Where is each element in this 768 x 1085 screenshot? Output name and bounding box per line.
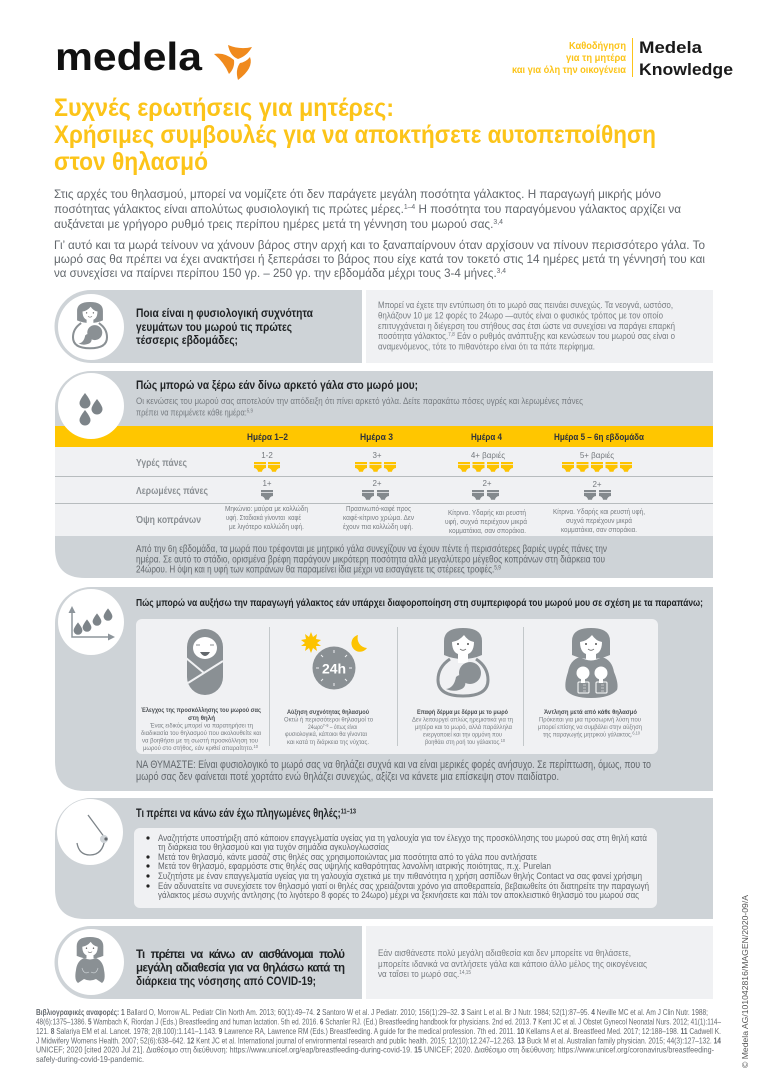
intro text: Γι’ αυτό και τα μωρά τείνουν να χάνουν βάρος στην αρχή και το ξαναπαίρνουν όταν αρχίσουν να πίνουν περισσότερο γάλα. Το bbox=[54, 238, 705, 252]
tip text: pumping: 6,10 bbox=[632, 730, 640, 736]
tip text: latch check: διαδικασία του θηλασμού που ακολουθείτε και bbox=[141, 729, 261, 737]
icons: soiled diapers bbox=[261, 490, 611, 500]
heading: feeding frequency: τέσσερις εβδομάδες; bbox=[136, 335, 238, 347]
table header: Ημέρα 5 – 6η εβδομάδα bbox=[554, 432, 644, 443]
stool descriptions: έχουν πια κολλώδη υφή. bbox=[343, 523, 413, 531]
icon: unwell mother bbox=[58, 929, 124, 995]
intro: enough milk: 5,9 bbox=[247, 408, 253, 414]
intro text: Η ποσότητα του παραγόμενου γάλακτος αρχίζει να bbox=[415, 202, 681, 216]
icon: breast outline bbox=[57, 799, 123, 865]
tip text: more feeds: Οκτώ ή περισσότεροι θηλασμοί το bbox=[284, 716, 373, 724]
soiled diaper counts: 2+ bbox=[482, 479, 492, 488]
tip text: skin contact bbox=[412, 709, 513, 746]
reminder text: μωρό σας δεν φαίνεται ποτέ χορτάτο ενώ θηλάζει συνεχώς, αξίζει να κάνετε μια επίσκεψη στον παιδίατρο. bbox=[136, 771, 559, 783]
logo: medela bbox=[55, 36, 252, 80]
icon: 24h clock with sun and moon bbox=[301, 632, 367, 690]
header: Medela Knowledge: Knowledge bbox=[639, 60, 733, 79]
panel: enough milk bbox=[55, 371, 713, 578]
references: J Midwifery Womens Health. 2007; 52(6):638–642. 12 Kent JC et al. International journal of environmental research and public health. 2015; 12(10):12.247–12.263. 13 Buck M et al. Australian family physician. 2015; 44(3):127–132. 14 bbox=[36, 1036, 721, 1046]
icon: rising drops chart bbox=[58, 589, 124, 655]
tip text: skin contact: 10 bbox=[501, 738, 505, 743]
note: after week six: 5,9 bbox=[494, 566, 502, 572]
soiled diaper counts: 2+ bbox=[372, 479, 382, 488]
title bbox=[54, 94, 656, 176]
header: guidance tagline: για τη μητέρα bbox=[566, 53, 627, 64]
table row labels: Όψη κοπράνων bbox=[135, 515, 201, 526]
table header: Ημέρα 1–2 bbox=[247, 432, 288, 443]
references: UNICEF; 2020 [cited 2020 Jul 21]. Διαθέσιμο στη διεύθυνση: https://www.unicef.org/eap/breastfeeding-during-covid-19. 15 UNICEF; 2020. Διαθέσιμο στη διεύθυνση: https://www.unicef.org/coronavirus/breastfeeding- bbox=[36, 1044, 714, 1054]
wet diaper counts: 4+ βαριές bbox=[471, 451, 505, 460]
tip text: latch check: μωρού στο στήθος, εάν κριθεί απαραίτητο. bbox=[143, 745, 265, 752]
note: after week six: Από την 6η εβδομάδα, τα μωρά που τρέφονται με μητρικό γάλα συνεχίζουν να έχουν πέντε ή περισσότερες βαριές υγρές πάνες την bbox=[136, 543, 607, 555]
tip text: skin contact: βοηθάει στη ροή του γάλακτος. bbox=[425, 739, 514, 746]
soiled diaper counts bbox=[262, 479, 602, 489]
references bbox=[36, 1007, 721, 1064]
card: sore nipple tips: Μετά τον θηλασμό, εφαρμόστε στις θηλές σας υψηλής καθαρότητας λανολίνη ιατρικής ποιότητας, π.χ. Purelan bbox=[158, 861, 551, 872]
table header: Ημέρα 4 bbox=[471, 432, 503, 443]
intro text: μωρό σας θα πρέπει να έχει ανακτήσει ή ξεπεράσει το βάρος που είχε κατά τον τοκετό στις 14 ημέρες μετά τη γέννησή του και bbox=[54, 252, 705, 266]
answer text: feeding frequency: Εάν ο ρυθμός ανάπτυξης και κενώσεων του μωρού σας είναι ο bbox=[455, 331, 675, 341]
soiled diaper counts: 1+ bbox=[262, 479, 272, 488]
answer text: covid-19: μπορείτε ιδανικά να αντλήσετε γάλα και κάποιο άλλο μέλος της οικογένειας bbox=[378, 959, 647, 970]
stool descriptions: Κίτρινα. Υδαρής και ρευστή bbox=[448, 509, 526, 517]
tip text: latch check: Ένας ειδικός μπορεί να παρατηρήσει τη bbox=[149, 722, 253, 730]
heading: feeding frequency: γευμάτων του μωρού τις πρώτες bbox=[136, 322, 292, 334]
stool descriptions: καφέ-κίτρινο χρώμα. Δεν bbox=[343, 514, 414, 522]
answer text: feeding frequency: αναμενόμενος, τότε το πιθανότερο είναι ότι τα πάτε περίφημα. bbox=[378, 342, 595, 352]
references: Βιβλιογραφικές αναφορές: 1 Ballard O, Morrow AL. Pediatr Clin North Am. 2013; 60(1):49–74. 2 Santoro W et al. J Pediatr. 2010; 156(1):29–32. 3 Saint L et al. Br J Nutr. 1984; 52(1):87–95. 4 Neville MC et al. Am J Clin Nutr. 1988; bbox=[36, 1007, 708, 1017]
card: sore nipple tips: Αναζητήστε υποστήριξη από κάποιον επαγγελματία υγείας για τη γαλουχία για τον έλεγχο της προσκόλλησης του μωρού σας στη θηλή κατά bbox=[158, 833, 647, 844]
note: after week six: ημέρα. Σε αυτό το στάδιο, ορισμένα βρέφη παράγουν μικρότερη ποσότητα αλλά μεγαλύτερο μέγεθος κοπράνων στη διάρκεια του bbox=[136, 554, 605, 566]
answer text: feeding frequency: θηλάζουν 10 με 12 φορές το 24ωρο —αυτός είναι ο φυσικός τρόπος με τον οποίο bbox=[378, 310, 663, 320]
tip text: skin contact: Δεν λειτουργεί απλώς ηρεμιστικά για τη bbox=[412, 716, 513, 724]
intro text: ποσότητας γάλακτος είναι απολύτως φυσιολογική τις πρώτες μέρες. bbox=[54, 202, 412, 216]
answer text: covid-19: 14,15 bbox=[459, 970, 471, 976]
references: 121. 8 Salariya EM et al. Lancet. 1978; 2(8.100):1.141–1.143. 9 Lawrence RA, Lawrence RM (Eds.) Breastfeeding. A guide for the medical profession. 7th ed. 2011. 10 Kellams A et al. Breastfeed Med. 2017; 12:188–198. 11 Cadwell K. bbox=[36, 1026, 721, 1036]
header: guidance tagline: και για όλη την οικογένεια bbox=[512, 65, 627, 76]
answer text: feeding frequency: Μπορεί να έχετε την εντύπωση ότι το μωρό σας πεινάει συνεχώς. Τα νεογνά, ωστόσο, bbox=[378, 300, 673, 310]
answer text: covid-19: να ταΐσει το μωρό σας. bbox=[378, 969, 473, 980]
stool descriptions: Κίτρινα. Υδαρής και ρευστή υφή, bbox=[553, 508, 645, 516]
card: sore nipple tips: Εάν αδυνατείτε να συνεχίσετε τον θηλασμό γιατί οι θηλές σας χρειάζονται χρόνο για αποθεραπεία, βεβαιωθείτε ότι διατηρείτε την παραγωγή bbox=[158, 881, 649, 892]
tip text: more feeds: 7–9 bbox=[323, 723, 329, 728]
answer text: feeding frequency: επιτυγχάνεται η διέγερση του στήθους σας έτσι ώστε να συνεχίσει να παράγει επαρκή bbox=[378, 321, 675, 331]
heading: covid-19: μεγάλη αδιαθεσία για να θηλάσω κατά τη bbox=[136, 962, 345, 974]
card: sore nipple tips: γάλακτος μέσω συχνής άντλησης (το λιγότερο 8 φορές το 24ωρο) μέχρι να ξεκινήσετε και πάλι τον αποκλειστικό θηλασμό του μωρού σας bbox=[158, 890, 639, 901]
stool descriptions: Πρασινωπό-καφέ προς bbox=[346, 505, 412, 513]
heading: covid-19 bbox=[136, 949, 345, 988]
tip text: pumping: Άντληση μετά από κάθε θηλασμό bbox=[544, 708, 637, 716]
panel: sore nipples bbox=[55, 798, 713, 919]
table header: Ημέρα 3 bbox=[360, 432, 393, 443]
table row labels bbox=[135, 458, 208, 526]
header: Medela Knowledge bbox=[639, 38, 733, 79]
heading: covid-19: διάρκεια της νόσησης από COVID-19; bbox=[136, 976, 316, 988]
intro: enough milk: πρέπει να περιμένετε κάθε ημέρα: bbox=[136, 408, 272, 418]
reminder text: ΝΑ ΘΥΜΑΣΤΕ: Είναι φυσιολογικό το μωρό σας να θηλάζει συχνά και να είναι μερικές φορές ανήσυχο. Σε περίπτωση, όμως, που το bbox=[136, 759, 651, 771]
card: sore nipple tips bbox=[134, 828, 657, 908]
title: στον θηλασμό bbox=[54, 148, 208, 176]
title: Χρήσιμες συμβουλές για να αποκτήσετε αυτοπεποίθηση bbox=[54, 121, 656, 149]
logo: medela: medela bbox=[55, 36, 202, 79]
tip text: skin contact: μητέρα και το μωρό, αλλά παράλληλα bbox=[415, 723, 512, 731]
intro text: αυξάνεται με γρήγορο ρυθμό τρεις περίπου ημέρες μετά τη γέννηση του μωρού σας. bbox=[54, 217, 500, 231]
tip text: pumping: μπορεί επίσης να συμβάλει στην αύξηση bbox=[538, 723, 642, 731]
stool descriptions: υφή, συχνά περιέχουν μικρά bbox=[445, 518, 527, 526]
wet diaper counts: 1-2 bbox=[261, 451, 273, 460]
table row labels: Υγρές πάνες bbox=[136, 458, 187, 469]
intro: enough milk: Οι κενώσεις του μωρού σας αποτελούν την απόδειξη ότι πίνει αρκετό γάλα. Δείτε παρακάτω πόσες υγρές και λερωμένες πάνες bbox=[136, 396, 584, 406]
references: 48(6):1375–1386. 5 Wambach K, Riordan J (Eds.) Breastfeeding and human lactation. 5th ed. 2016. 6 Schanler RJ. (Ed.) Breastfeeding handbook for physicians. 2nd ed. 2013. 7 Kent JC et al. J Obstet Gynecol Neonatal Nurs. 2012; 41(1):114– bbox=[36, 1016, 721, 1026]
wet diaper counts: 5+ βαριές bbox=[580, 451, 614, 460]
copyright note: © Medela AG/101042816/MAGEN/2020-09/A bbox=[741, 894, 750, 1068]
icon: 24h clock with sun and moon: 24h bbox=[322, 660, 346, 676]
panel: feeding frequency bbox=[54, 290, 713, 363]
card: sore nipple tips: τη διάρκεια του θηλασμού και για τυχόν σημάδια αγκυλογλωσσίας bbox=[158, 842, 389, 853]
intro: enough milk bbox=[136, 396, 584, 418]
icon: mother pumping bbox=[565, 628, 618, 698]
icon: nursing mother bbox=[58, 294, 124, 360]
heading: feeding frequency: Ποια είναι η φυσιολογική συχνότητα bbox=[136, 308, 313, 320]
card: sore nipple tips: Μετά τον θηλασμό, κάντε μασάζ στις θηλές σας χρησιμοποιώντας μια ποσότητα από το γάλα που αντλήσατε bbox=[158, 852, 538, 863]
answer text: covid-19 bbox=[378, 948, 647, 980]
icon: milk drops bbox=[58, 373, 124, 439]
stool descriptions: κομματάκια, σαν σποράκια. bbox=[449, 527, 526, 535]
tip text: latch check: να βοηθήσει με τη σωστή προσκόλληση του bbox=[142, 736, 258, 744]
stool descriptions: με λιγότερο κολλώδη υφή. bbox=[229, 523, 304, 531]
panel: increase milk supply bbox=[55, 587, 713, 791]
tip text: pumping: της παραγωγής μητρικού γάλακτος. bbox=[543, 732, 645, 738]
icons: wet diapers bbox=[254, 462, 632, 472]
header: Medela Knowledge: Medela bbox=[639, 38, 703, 57]
heading: sore nipples: 11–13 bbox=[341, 808, 356, 816]
icon: swaddled baby bbox=[180, 629, 223, 695]
heading: covid-19: Τι πρέπει να κάνω αν αισθάνομαι πολύ bbox=[136, 949, 345, 961]
wet diaper counts bbox=[261, 451, 614, 460]
intro text bbox=[54, 187, 705, 280]
note: after week six bbox=[136, 543, 607, 576]
header: guidance tagline bbox=[512, 41, 627, 76]
table row labels: Λερωμένες πάνες bbox=[136, 486, 208, 497]
stool descriptions: Μηκώνιο: μαύρα με κολλώδη bbox=[225, 505, 308, 513]
panel: covid-19 bbox=[54, 926, 713, 999]
answer text: feeding frequency bbox=[378, 300, 675, 352]
tip text: latch check bbox=[141, 706, 262, 752]
tip text: more feeds: – όπως είναι bbox=[328, 723, 357, 731]
icon: skin to skin bbox=[438, 628, 488, 696]
answer text: covid-19: Εάν αισθάνεστε πολύ μεγάλη αδιαθεσία και δεν μπορείτε να θηλάσετε, bbox=[378, 948, 631, 959]
tip text: more feeds: 24ωρο bbox=[308, 724, 328, 731]
references: safely-during-covid-19-pandemic. bbox=[36, 1054, 144, 1064]
intro text: 3,4 bbox=[497, 268, 506, 275]
tip text: more feeds bbox=[284, 708, 373, 746]
card: sore nipple tips: Συζητήστε με έναν επαγγελματία υγείας για τη γαλουχία σχετικά με την πιθανότητα η χρήση ασπίδων θηλής Contact να σας φανεί χρήσιμη bbox=[158, 871, 642, 882]
card: four tips bbox=[136, 619, 658, 754]
note: after week six: 24ώρου. Η όψη και η υφή των κοπράνων θα παραμείνει ίδια μέχρι να εισαγάγετε τις στέρεες τροφές. bbox=[136, 564, 579, 576]
header: guidance tagline: Καθοδήγηση bbox=[569, 41, 626, 52]
tip text: pumping: Πρόκειται για μια προσωρινή λύση που bbox=[539, 716, 641, 724]
stool descriptions: κομματάκια, σαν σποράκια. bbox=[561, 526, 637, 534]
stool descriptions: υφή. Σταδιακά γίνονται καφέ bbox=[226, 514, 301, 522]
heading: sore nipples: Τι πρέπει να κάνω εάν έχω πληγωμένες θηλές; bbox=[136, 808, 392, 820]
intro text: Στις αρχές του θηλασμού, μπορεί να νομίζετε ότι δεν παράγετε μεγάλη ποσότητα γάλακτος. Η παραγωγή μικρής μόνο bbox=[54, 187, 661, 201]
heading: feeding frequency bbox=[136, 308, 313, 347]
table header bbox=[247, 432, 644, 443]
tip text: skin contact: Επαφή δέρμα με δέρμα με το μωρό bbox=[417, 709, 508, 716]
answer text: feeding frequency: ποσότητα γάλακτος. bbox=[378, 331, 458, 341]
reminder text bbox=[136, 759, 651, 783]
wet diaper counts: 3+ bbox=[372, 451, 382, 460]
answer text: feeding frequency: 7,8 bbox=[448, 332, 455, 338]
tip text: latch check: στη θηλή bbox=[188, 714, 215, 722]
intro text: 1–4 bbox=[404, 204, 415, 211]
tip text: more feeds: φυσιολογικά, κάποιοι θα γίνονται bbox=[285, 730, 367, 738]
tip text: more feeds: Αύξηση συχνότητας θηλασμού bbox=[287, 708, 369, 716]
intro text: να συνεχίσει να παίρνει περίπου 150 γρ. – 250 γρ. την εβδομάδα μέχρι τους 3-4 μήνες. bbox=[54, 266, 515, 280]
stool descriptions bbox=[225, 505, 645, 535]
tip text: more feeds: και κατά τη διάρκεια της νύχτας. bbox=[287, 738, 369, 746]
intro text: 3,4 bbox=[493, 219, 503, 226]
stool descriptions: συχνά περιέχουν μικρά bbox=[566, 517, 632, 525]
tip text: latch check: 10 bbox=[253, 744, 258, 749]
title: Συχνές ερωτήσεις για μητέρες: bbox=[54, 94, 394, 122]
tip text: pumping bbox=[538, 708, 642, 738]
heading: enough milk: Πώς μπορώ να ξέρω εάν δίνω αρκετό γάλα στο μωρό μου; bbox=[136, 380, 418, 392]
tip text: latch check: Έλεγχος της προσκόλλησης του μωρού σας bbox=[141, 706, 262, 714]
soiled diaper counts: 2+ bbox=[592, 480, 602, 489]
tip text: skin contact: ενεργοποιεί και την ορμόνη που bbox=[423, 730, 502, 738]
